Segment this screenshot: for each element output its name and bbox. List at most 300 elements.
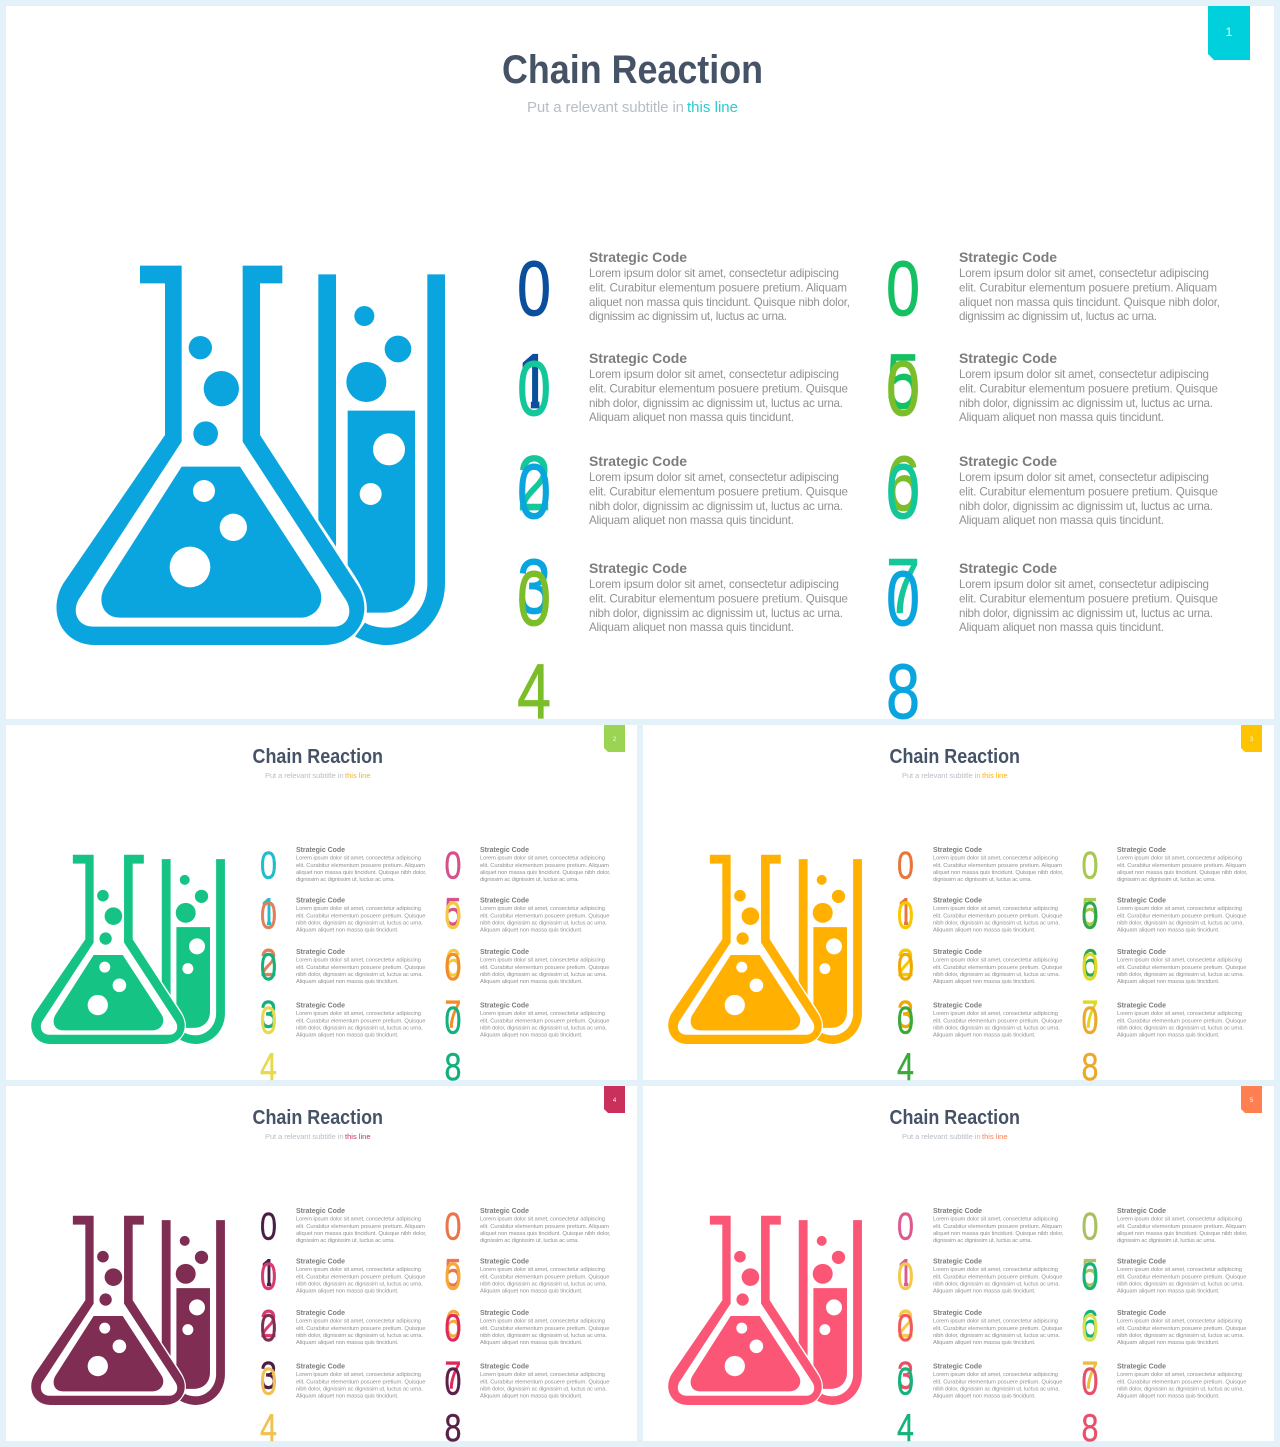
text block 1: elit. Curabitur elementum posuere pretium. Aliquam	[933, 863, 1062, 869]
text block 3: Strategic Code	[296, 949, 345, 956]
subtitle: this line	[687, 99, 738, 116]
text block 1	[589, 249, 850, 323]
text block 7: nibh dolor, dignissim ac dignissim ut, luctus ac urna.	[959, 500, 1213, 513]
text block 3: nibh dolor, dignissim ac dignissim ut, luctus ac urna.	[933, 972, 1060, 978]
text block 4: elit. Curabitur elementum posuere pretium. Quisque	[296, 1379, 426, 1385]
text block 8: Strategic Code	[959, 560, 1057, 576]
text block 8	[480, 1364, 610, 1400]
text block 5: Lorem ipsum dolor sit amet, consectetur adipiscing	[1117, 856, 1242, 862]
overlapping numerals column 1: 3	[897, 993, 914, 1036]
text block 7: Strategic Code	[959, 453, 1057, 469]
overlapping numerals column 1: 0	[260, 844, 277, 887]
text block 7: Lorem ipsum dolor sit amet, consectetur adipiscing	[1117, 1318, 1242, 1324]
subtitle: Put a relevant subtitle in	[902, 771, 980, 780]
text block 8: Lorem ipsum dolor sit amet, consectetur adipiscing	[959, 578, 1209, 591]
text block 5: dignissim ac dignissim ut, luctus ac urna.	[959, 310, 1157, 323]
text block 2	[296, 898, 426, 934]
text block 3: elit. Curabitur elementum posuere pretium. Quisque	[933, 1326, 1062, 1332]
text block 2: Aliquam aliquet non massa quis tincidunt.	[933, 1288, 1036, 1294]
text block 2: elit. Curabitur elementum posuere pretium. Quisque	[296, 913, 426, 919]
text block 2: Aliquam aliquet non massa quis tincidunt.	[296, 1288, 399, 1294]
overlapping numerals column 1: 1	[260, 1251, 277, 1295]
text block 6: nibh dolor, dignissim ac dignissim ut, luctus ac urna.	[1117, 920, 1244, 926]
text block 6	[480, 898, 610, 934]
text block 7: Aliquam aliquet non massa quis tincidunt.	[959, 514, 1164, 527]
text block 4: Aliquam aliquet non massa quis tincidunt.	[296, 1032, 399, 1038]
text block 3: Strategic Code	[933, 1310, 982, 1317]
page tab 3: 3	[1250, 737, 1254, 743]
text block 1: dignissim ac dignissim ut, luctus ac urna.	[933, 877, 1032, 883]
text block 2: elit. Curabitur elementum posuere pretium. Quisque	[296, 1274, 426, 1280]
subtitle: Put a relevant subtitle in	[265, 1132, 344, 1141]
overlapping numerals column 2: 0	[1082, 999, 1098, 1042]
overlapping numerals column 1: 0	[517, 555, 551, 642]
text block 7: Aliquam aliquet non massa quis tincidunt.	[480, 1340, 583, 1346]
text block 3: Aliquam aliquet non massa quis tincidunt.	[933, 1340, 1036, 1346]
text block 1	[296, 1208, 427, 1244]
overlapping numerals column 2: 0	[1082, 945, 1098, 989]
text block 8: elit. Curabitur elementum posuere pretium. Quisque	[1117, 1379, 1246, 1385]
text block 8: elit. Curabitur elementum posuere pretium. Quisque	[1117, 1018, 1246, 1024]
text block 6: Lorem ipsum dolor sit amet, consectetur adipiscing	[1117, 906, 1242, 912]
text block 7: nibh dolor, dignissim ac dignissim ut, luctus ac urna.	[1117, 972, 1244, 978]
text block 6: Aliquam aliquet non massa quis tincidunt.	[480, 928, 583, 934]
page tab 4	[604, 1086, 625, 1113]
text block 7	[1117, 949, 1246, 985]
text block 7: nibh dolor, dignissim ac dignissim ut, luctus ac urna.	[480, 1333, 607, 1339]
page tab 2: 2	[613, 737, 617, 743]
text block 3: Lorem ipsum dolor sit amet, consectetur adipiscing	[933, 1318, 1058, 1324]
text block 4: Strategic Code	[933, 1364, 982, 1370]
text block 2: Aliquam aliquet non massa quis tincidunt.	[589, 411, 794, 424]
overlapping numerals column 1: 0	[897, 1306, 914, 1350]
text block 1: aliquet non massa quis tincidunt. Quisque nibh dolor,	[933, 1231, 1064, 1237]
text block 3: nibh dolor, dignissim ac dignissim ut, luctus ac urna.	[933, 1333, 1060, 1339]
overlapping numerals column 2: 0	[445, 1255, 461, 1298]
text block 2: Lorem ipsum dolor sit amet, consectetur adipiscing	[933, 906, 1058, 912]
overlapping numerals column 1: 3	[897, 1354, 914, 1397]
overlapping numerals column 1: 0	[517, 448, 551, 535]
overlapping numerals column 1: 2	[897, 1302, 914, 1346]
text block 3: elit. Curabitur elementum posuere pretium. Quisque	[296, 1326, 426, 1332]
text block 3	[933, 949, 1062, 985]
text block 8: Aliquam aliquet non massa quis tincidunt.	[1117, 1394, 1220, 1400]
overlapping numerals column 1: 2	[517, 440, 551, 527]
text block 5: aliquet non massa quis tincidunt. Quisque nibh dolor,	[480, 1231, 611, 1237]
overlapping numerals column 1: 0	[260, 1306, 277, 1350]
text block 6: Strategic Code	[480, 1258, 529, 1266]
overlapping numerals column 2: 0	[445, 1306, 461, 1350]
text block 3	[296, 1310, 426, 1346]
text block 6	[1117, 898, 1246, 934]
overlapping numerals column 1: 4	[260, 1045, 277, 1089]
text block 4: Strategic Code	[933, 1002, 982, 1010]
text block 7	[480, 949, 610, 985]
overlapping numerals column 1: 1	[517, 338, 551, 425]
text block 1: Lorem ipsum dolor sit amet, consectetur adipiscing	[933, 856, 1058, 862]
overlapping numerals column 1: 3	[260, 1354, 277, 1397]
text block 4: nibh dolor, dignissim ac dignissim ut, luctus ac urna.	[589, 607, 843, 620]
text block 2: Strategic Code	[933, 898, 982, 904]
title: Chain Reaction	[252, 1107, 383, 1129]
subtitle: Put a relevant subtitle in	[902, 1132, 980, 1141]
overlapping numerals column 1: 4	[897, 1045, 914, 1089]
overlapping numerals column 2: 6	[445, 1302, 461, 1346]
overlapping numerals column 1: 0	[897, 999, 914, 1042]
overlapping numerals column 2: 5	[445, 1251, 461, 1295]
text block 2: elit. Curabitur elementum posuere pretium. Quisque	[589, 382, 848, 396]
text block 6: elit. Curabitur elementum posuere pretium. Quisque	[959, 382, 1218, 396]
text block 1: Strategic Code	[296, 847, 345, 854]
text block 6: Strategic Code	[1117, 1258, 1166, 1266]
text block 8: Aliquam aliquet non massa quis tincidunt.	[480, 1394, 583, 1400]
text block 3: Aliquam aliquet non massa quis tincidunt.	[296, 1340, 399, 1346]
overlapping numerals column 1: 0	[897, 894, 914, 937]
text block 2	[933, 898, 1062, 934]
text block 1: aliquet non massa quis tincidunt. Quisque nibh dolor,	[589, 296, 850, 309]
text block 3: Aliquam aliquet non massa quis tincidunt.	[933, 979, 1036, 985]
text block 5: elit. Curabitur elementum posuere pretium. Aliquam	[1117, 863, 1246, 869]
text block 5: dignissim ac dignissim ut, luctus ac urna.	[1117, 1238, 1216, 1244]
overlapping numerals column 2	[445, 1205, 461, 1447]
text block 4: Strategic Code	[296, 1364, 345, 1370]
text block 4	[933, 1002, 1062, 1038]
text block 6: nibh dolor, dignissim ac dignissim ut, luctus ac urna.	[480, 1282, 607, 1288]
text block 8	[1117, 1364, 1246, 1400]
text block 7: Strategic Code	[1117, 1310, 1166, 1317]
text block 8: nibh dolor, dignissim ac dignissim ut, luctus ac urna.	[1117, 1386, 1244, 1392]
overlapping numerals column 2: 5	[1082, 1251, 1098, 1295]
overlapping numerals column 1: 0	[897, 1360, 914, 1403]
text block 8: Aliquam aliquet non massa quis tincidunt.	[959, 621, 1164, 634]
overlapping numerals column 2: 0	[445, 1205, 461, 1248]
overlapping numerals column 1	[518, 260, 550, 719]
text block 6: nibh dolor, dignissim ac dignissim ut, luctus ac urna.	[480, 920, 607, 926]
text block 6: elit. Curabitur elementum posuere pretium. Quisque	[1117, 1274, 1246, 1280]
text block 1: aliquet non massa quis tincidunt. Quisque nibh dolor,	[933, 870, 1064, 876]
text block 1: aliquet non massa quis tincidunt. Quisque nibh dolor,	[296, 870, 427, 876]
slide 2 content	[252, 746, 611, 1089]
panel: slide 4	[6, 1086, 637, 1447]
text block 5: Lorem ipsum dolor sit amet, consectetur adipiscing	[480, 1216, 605, 1222]
title: Chain Reaction	[890, 746, 1020, 768]
text block 5: elit. Curabitur elementum posuere pretium. Aliquam	[959, 282, 1217, 294]
page tab 1	[1208, 6, 1250, 60]
overlapping numerals column 1: 0	[897, 945, 914, 989]
overlapping numerals column 1: 4	[517, 648, 551, 735]
text block 5: Strategic Code	[1117, 1208, 1166, 1215]
overlapping numerals column 2: 0	[445, 999, 461, 1042]
text block 7: Strategic Code	[480, 1310, 529, 1317]
overlapping numerals column 1: 0	[260, 1360, 277, 1403]
text block 8: Lorem ipsum dolor sit amet, consectetur adipiscing	[1117, 1372, 1242, 1378]
text block 6: Aliquam aliquet non massa quis tincidunt.	[480, 1288, 583, 1294]
text block 4: elit. Curabitur elementum posuere pretium. Quisque	[933, 1379, 1062, 1385]
text block 7: Aliquam aliquet non massa quis tincidunt.	[1117, 979, 1220, 985]
text block 4: Strategic Code	[589, 560, 687, 576]
text block 8: Lorem ipsum dolor sit amet, consectetur adipiscing	[480, 1011, 605, 1017]
text block 2: elit. Curabitur elementum posuere pretium. Quisque	[933, 913, 1062, 919]
overlapping numerals column 2	[886, 245, 920, 735]
text block 7	[480, 1310, 610, 1346]
text block 4: Lorem ipsum dolor sit amet, consectetur adipiscing	[296, 1011, 421, 1017]
text block 5: Strategic Code	[959, 249, 1057, 265]
subtitle: this line	[345, 771, 370, 780]
text block 1: Lorem ipsum dolor sit amet, consectetur adipiscing	[933, 1216, 1058, 1222]
panel: slide 2	[6, 725, 637, 1089]
text block 6: Lorem ipsum dolor sit amet, consectetur adipiscing	[1117, 1267, 1242, 1273]
text block 1: elit. Curabitur elementum posuere pretium. Aliquam	[589, 282, 847, 294]
title: Chain Reaction	[502, 48, 763, 92]
text block 8: elit. Curabitur elementum posuere pretium. Quisque	[480, 1379, 610, 1385]
overlapping numerals column 2: 0	[1082, 1255, 1098, 1298]
text block 8: Strategic Code	[1117, 1002, 1166, 1010]
text block 4	[933, 1364, 1062, 1400]
icon: pink flask and test tube	[668, 1216, 862, 1405]
text block 4: nibh dolor, dignissim ac dignissim ut, luctus ac urna.	[933, 1386, 1060, 1392]
text block 3: Strategic Code	[933, 949, 982, 956]
overlapping numerals column 2: 6	[886, 440, 920, 527]
text block 7: Lorem ipsum dolor sit amet, consectetur adipiscing	[959, 471, 1209, 484]
text block 8: nibh dolor, dignissim ac dignissim ut, luctus ac urna.	[1117, 1026, 1244, 1032]
text block 8	[1117, 1002, 1246, 1038]
overlapping numerals column 2	[1082, 844, 1098, 1089]
subtitle: Put a relevant subtitle in	[527, 99, 684, 116]
text block 6: Strategic Code	[959, 350, 1057, 366]
panel: slide 1	[6, 6, 1274, 735]
text block 7: elit. Curabitur elementum posuere pretium. Quisque	[480, 965, 610, 971]
text block 4: Strategic Code	[296, 1002, 345, 1010]
text block 6	[959, 350, 1218, 424]
text block 2: Strategic Code	[933, 1258, 982, 1266]
slide 4 content	[252, 1107, 611, 1447]
text block 6: nibh dolor, dignissim ac dignissim ut, luctus ac urna.	[1117, 1282, 1244, 1288]
text block 1: dignissim ac dignissim ut, luctus ac urna.	[296, 877, 395, 883]
overlapping numerals column 2: 7	[445, 1354, 461, 1397]
text block 4: Aliquam aliquet non massa quis tincidunt.	[589, 621, 794, 634]
overlapping numerals column 2: 5	[445, 890, 461, 934]
text block 8: Lorem ipsum dolor sit amet, consectetur adipiscing	[1117, 1011, 1242, 1017]
text block 2: Lorem ipsum dolor sit amet, consectetur adipiscing	[589, 368, 839, 381]
text block 4	[296, 1002, 426, 1038]
text block 2: Strategic Code	[296, 898, 345, 904]
text block 3: elit. Curabitur elementum posuere pretium. Quisque	[296, 965, 426, 971]
title: Chain Reaction	[890, 1107, 1020, 1129]
text block 1: Lorem ipsum dolor sit amet, consectetur adipiscing	[589, 267, 839, 280]
text block 5: aliquet non massa quis tincidunt. Quisque nibh dolor,	[1117, 1231, 1248, 1237]
text block 6: Lorem ipsum dolor sit amet, consectetur adipiscing	[480, 1267, 605, 1273]
text block 8: elit. Curabitur elementum posuere pretium. Quisque	[959, 592, 1218, 606]
overlapping numerals column 2: 8	[445, 1045, 461, 1089]
overlapping numerals column 2: 0	[1082, 1205, 1098, 1248]
text block 1: Lorem ipsum dolor sit amet, consectetur adipiscing	[296, 856, 421, 862]
text block 3	[589, 453, 848, 527]
text block 6: Aliquam aliquet non massa quis tincidunt.	[959, 411, 1164, 424]
overlapping numerals column 1: 2	[260, 1302, 277, 1346]
overlapping numerals column 2: 7	[886, 543, 920, 630]
text block 3: Lorem ipsum dolor sit amet, consectetur adipiscing	[933, 958, 1058, 964]
overlapping numerals column 2	[445, 844, 461, 1089]
overlapping numerals column 1	[260, 851, 276, 1080]
text block 7: Lorem ipsum dolor sit amet, consectetur adipiscing	[1117, 958, 1242, 964]
text block 7: Lorem ipsum dolor sit amet, consectetur adipiscing	[480, 1318, 605, 1324]
text block 6: Aliquam aliquet non massa quis tincidunt.	[1117, 1288, 1220, 1294]
overlapping numerals column 1: 0	[260, 999, 277, 1042]
text block 8: Strategic Code	[1117, 1364, 1166, 1370]
text block 1: Lorem ipsum dolor sit amet, consectetur adipiscing	[296, 1216, 421, 1222]
slide 3 content	[890, 746, 1248, 1089]
overlapping numerals column 1	[260, 1212, 276, 1442]
overlapping numerals column 2: 0	[886, 245, 920, 332]
text block 4: Aliquam aliquet non massa quis tincidunt.	[296, 1394, 399, 1400]
overlapping numerals column 2: 0	[1082, 1306, 1098, 1350]
text block 2: nibh dolor, dignissim ac dignissim ut, luctus ac urna.	[933, 920, 1060, 926]
text block 1: elit. Curabitur elementum posuere pretium. Aliquam	[933, 1224, 1062, 1230]
icon: maroon flask and test tube	[31, 1216, 225, 1405]
text block 1	[933, 1208, 1064, 1244]
text block 4: elit. Curabitur elementum posuere pretium. Quisque	[296, 1018, 426, 1024]
title: Chain Reaction	[252, 746, 383, 768]
overlapping numerals column 1: 2	[897, 941, 914, 985]
text block 5: Strategic Code	[1117, 847, 1166, 854]
text block 2: Lorem ipsum dolor sit amet, consectetur adipiscing	[296, 1267, 421, 1273]
subtitle: this line	[982, 1132, 1008, 1141]
page tab 3	[1241, 725, 1262, 752]
subtitle: Put a relevant subtitle in	[265, 771, 344, 780]
text block 2: Aliquam aliquet non massa quis tincidunt.	[296, 928, 399, 934]
overlapping numerals column 2: 0	[445, 1360, 461, 1403]
overlapping numerals column 2: 0	[1082, 1360, 1098, 1403]
page tab 4: 4	[613, 1098, 617, 1104]
text block 2: nibh dolor, dignissim ac dignissim ut, luctus ac urna.	[296, 1282, 423, 1288]
text block 6	[480, 1258, 610, 1294]
overlapping numerals column 1: 2	[260, 941, 277, 985]
text block 1: dignissim ac dignissim ut, luctus ac urna.	[589, 310, 787, 323]
text block 4: Lorem ipsum dolor sit amet, consectetur adipiscing	[933, 1372, 1058, 1378]
text block 3: Aliquam aliquet non massa quis tincidunt.	[296, 979, 399, 985]
text block 8	[480, 1002, 610, 1038]
overlapping numerals column 1: 0	[517, 245, 551, 332]
text block 3: nibh dolor, dignissim ac dignissim ut, luctus ac urna.	[296, 1333, 423, 1339]
text block 2: nibh dolor, dignissim ac dignissim ut, luctus ac urna.	[933, 1282, 1060, 1288]
overlapping numerals column 1: 1	[897, 1251, 914, 1295]
text block 3: nibh dolor, dignissim ac dignissim ut, luctus ac urna.	[589, 500, 843, 513]
overlapping numerals column 1: 0	[260, 1205, 277, 1248]
text block 1: elit. Curabitur elementum posuere pretium. Aliquam	[296, 1224, 425, 1230]
text block 4: Aliquam aliquet non massa quis tincidunt.	[933, 1394, 1036, 1400]
overlapping numerals column 2: 8	[886, 648, 920, 735]
text block 1: Strategic Code	[933, 1208, 982, 1215]
text block 5: elit. Curabitur elementum posuere pretium. Aliquam	[1117, 1224, 1246, 1230]
overlapping numerals column 2: 0	[445, 945, 461, 989]
text block 4: Lorem ipsum dolor sit amet, consectetur adipiscing	[589, 578, 839, 591]
overlapping numerals column 2: 8	[1082, 1045, 1098, 1089]
overlapping numerals column 2: 0	[1082, 894, 1098, 937]
text block 5	[1117, 847, 1248, 883]
overlapping numerals column 2: 0	[445, 844, 461, 887]
text block 4	[589, 560, 848, 634]
text block 4: nibh dolor, dignissim ac dignissim ut, luctus ac urna.	[296, 1386, 423, 1392]
overlapping numerals column 1	[898, 1212, 914, 1442]
text block 8: Lorem ipsum dolor sit amet, consectetur adipiscing	[480, 1372, 605, 1378]
text block 5: Lorem ipsum dolor sit amet, consectetur adipiscing	[480, 856, 605, 862]
overlapping numerals column 2: 5	[886, 338, 920, 425]
overlapping numerals column 2	[1082, 1205, 1098, 1447]
text block 8: nibh dolor, dignissim ac dignissim ut, luctus ac urna.	[959, 607, 1213, 620]
overlapping numerals column 1	[898, 851, 914, 1080]
text block 3: Strategic Code	[589, 453, 687, 469]
text block 5	[1117, 1208, 1248, 1244]
overlapping numerals column 2: 6	[1082, 1302, 1098, 1346]
overlapping numerals column 2: 0	[1082, 844, 1098, 887]
subtitle: this line	[345, 1132, 370, 1141]
text block 3: nibh dolor, dignissim ac dignissim ut, luctus ac urna.	[296, 972, 423, 978]
overlapping numerals column 1: 0	[897, 1255, 914, 1298]
overlapping numerals column 1: 0	[260, 894, 277, 937]
text block 5: elit. Curabitur elementum posuere pretium. Aliquam	[480, 863, 609, 869]
text block 5	[959, 249, 1220, 323]
overlapping numerals column 1: 0	[897, 1205, 914, 1248]
text block 5: aliquet non massa quis tincidunt. Quisque nibh dolor,	[1117, 870, 1248, 876]
text block 1: elit. Curabitur elementum posuere pretium. Aliquam	[296, 863, 425, 869]
text block 7: Lorem ipsum dolor sit amet, consectetur adipiscing	[480, 958, 605, 964]
slide 5 content	[890, 1107, 1248, 1447]
overlapping numerals column 1: 0	[260, 945, 277, 989]
text block 1: Strategic Code	[589, 249, 687, 265]
text block 3	[933, 1310, 1062, 1346]
text block 4	[296, 1364, 426, 1400]
text block 3: Lorem ipsum dolor sit amet, consectetur adipiscing	[296, 1318, 421, 1324]
text block 8: Strategic Code	[480, 1364, 529, 1370]
text block 8	[959, 560, 1218, 634]
text block 3: elit. Curabitur elementum posuere pretium. Quisque	[933, 965, 1062, 971]
text block 7	[1117, 1310, 1246, 1346]
text block 6: nibh dolor, dignissim ac dignissim ut, luctus ac urna.	[959, 397, 1213, 410]
page tab 5: 5	[1250, 1098, 1254, 1104]
text block 7: elit. Curabitur elementum posuere pretium. Quisque	[959, 486, 1218, 498]
text block 1: aliquet non massa quis tincidunt. Quisque nibh dolor,	[296, 1231, 427, 1237]
text block 1: dignissim ac dignissim ut, luctus ac urna.	[296, 1238, 395, 1244]
text block 6: Strategic Code	[1117, 898, 1166, 904]
text block 3: Lorem ipsum dolor sit amet, consectetur adipiscing	[296, 958, 421, 964]
text block 6	[1117, 1258, 1246, 1294]
text block 7: Aliquam aliquet non massa quis tincidunt.	[1117, 1340, 1220, 1346]
overlapping numerals column 1: 0	[260, 1255, 277, 1298]
text block 6: elit. Curabitur elementum posuere pretium. Quisque	[480, 913, 610, 919]
text block 2: elit. Curabitur elementum posuere pretium. Quisque	[933, 1274, 1062, 1280]
text block 2: Strategic Code	[589, 350, 687, 366]
text block 4: Lorem ipsum dolor sit amet, consectetur adipiscing	[933, 1011, 1058, 1017]
overlapping numerals column 1: 0	[517, 345, 551, 432]
text block 8: Aliquam aliquet non massa quis tincidunt.	[1117, 1032, 1220, 1038]
text block 5: elit. Curabitur elementum posuere pretium. Aliquam	[480, 1224, 609, 1230]
text block 2: nibh dolor, dignissim ac dignissim ut, luctus ac urna.	[296, 920, 423, 926]
panel: slide 5	[643, 1086, 1274, 1447]
overlapping numerals column 1: 3	[517, 543, 551, 630]
overlapping numerals column 2: 7	[445, 993, 461, 1036]
overlapping numerals column 2: 0	[886, 448, 920, 535]
text block 5: Strategic Code	[480, 847, 529, 854]
text block 8: nibh dolor, dignissim ac dignissim ut, luctus ac urna.	[480, 1386, 607, 1392]
text block 2: nibh dolor, dignissim ac dignissim ut, luctus ac urna.	[589, 397, 843, 410]
text block 5: aliquet non massa quis tincidunt. Quisque nibh dolor,	[959, 296, 1220, 309]
text block 6: Strategic Code	[480, 898, 529, 904]
page tab 5	[1241, 1086, 1262, 1113]
icon: flask and test tube	[56, 266, 445, 645]
overlapping numerals column 1: 1	[260, 890, 277, 934]
text block 1: dignissim ac dignissim ut, luctus ac urna.	[933, 1238, 1032, 1244]
text block 8: Strategic Code	[480, 1002, 529, 1010]
